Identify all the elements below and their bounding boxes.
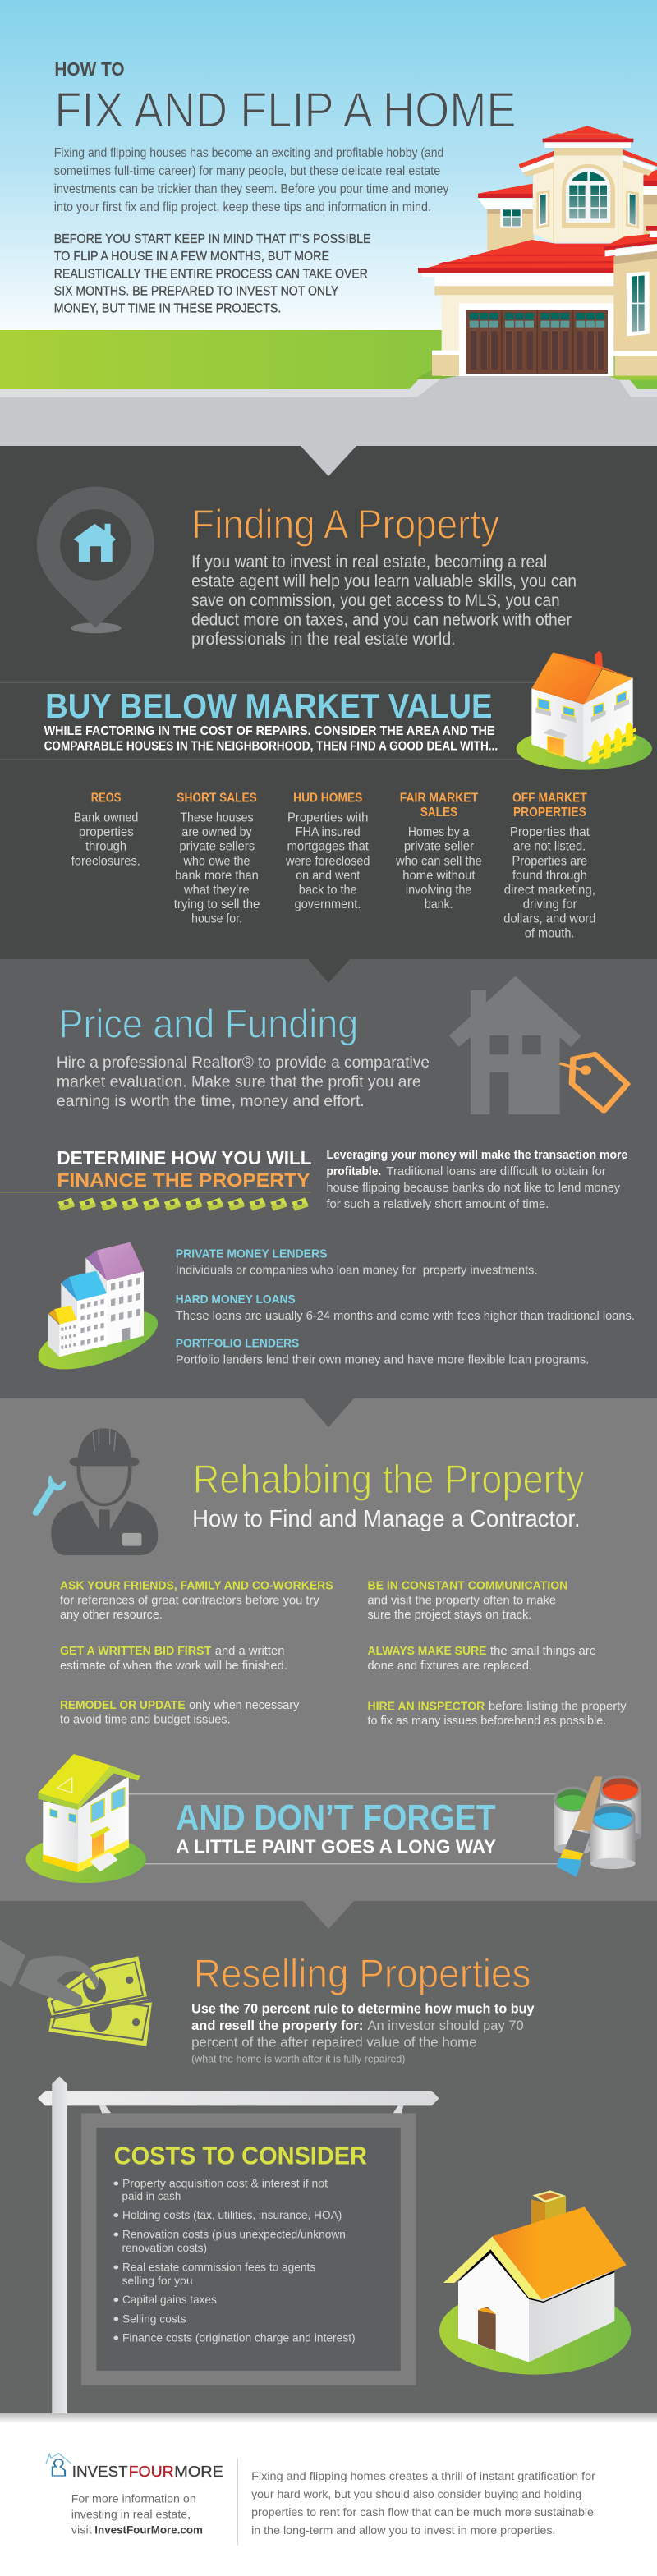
logo: invest four more bbox=[46, 2454, 223, 2481]
column: off market properties bbox=[503, 790, 596, 940]
timing paragraph: REALISTICALLY THE ENTIRE PROCESS CAN TAKE OVER bbox=[54, 267, 368, 282]
column: fair market sales: SALES bbox=[420, 805, 457, 819]
icon: hand with money bbox=[0, 1940, 152, 2046]
tip: inspector: HIRE AN INSPECTOR bbox=[367, 1698, 485, 1713]
side windows bbox=[536, 190, 639, 229]
arched window bbox=[562, 164, 615, 228]
tower bbox=[519, 126, 657, 244]
costs list: paid in cash bbox=[122, 2190, 181, 2202]
tip: communication: sure the project stays on track. bbox=[367, 1607, 531, 1622]
panel: costs to consider sign bbox=[81, 2113, 416, 2385]
notch arrow bbox=[301, 446, 356, 476]
grass bbox=[0, 330, 657, 389]
paint brush bbox=[557, 1776, 602, 1877]
garage block bbox=[422, 273, 613, 376]
column: hud homes: were foreclosed bbox=[285, 853, 370, 868]
heading: determine how you will finance the property: FINANCE THE PROPERTY bbox=[57, 1169, 310, 1191]
lender: private money lenders: PRIVATE MONEY LENDERS bbox=[176, 1247, 327, 1260]
column: fair market sales: private seller bbox=[404, 838, 474, 853]
leverage paragraph: for such a relatively short amount of time. bbox=[326, 1196, 549, 1210]
section background bbox=[0, 1398, 657, 1901]
more information text: visit bbox=[71, 2523, 92, 2537]
column: off market properties: OFF MARKET bbox=[512, 790, 587, 805]
icon: house with price tag bbox=[449, 976, 627, 1114]
costs list bbox=[114, 2177, 356, 2344]
sign post bbox=[38, 2076, 439, 2414]
price and funding body: Hire a professional Realtor® to provide a comparative bbox=[57, 1054, 430, 1072]
red can bbox=[600, 1775, 641, 1843]
column: short sales: who owe the bbox=[183, 853, 250, 868]
garage door bbox=[466, 310, 608, 374]
tip: remodel: REMODEL OR UPDATE bbox=[60, 1697, 186, 1711]
more information text: investing in real estate, bbox=[71, 2508, 191, 2521]
costs list: Capital gains taxes bbox=[122, 2294, 217, 2306]
money icons row bbox=[57, 1198, 309, 1211]
timing paragraph: MONEY, BUT TIME IN THESE PROJECTS. bbox=[54, 301, 281, 316]
section background bbox=[0, 446, 657, 959]
costs list: Holding costs (tax, utilities, insurance, HOA) bbox=[122, 2209, 342, 2221]
tip: remodel bbox=[60, 1697, 300, 1726]
column: fair market sales: who can sell the bbox=[395, 853, 482, 868]
column: fair market sales: Homes by a bbox=[408, 824, 470, 838]
timing paragraph bbox=[54, 232, 371, 316]
tip: small things bbox=[367, 1643, 596, 1672]
band rules bbox=[126, 1793, 558, 1865]
how to label: HOW TO bbox=[54, 59, 125, 80]
tip: communication bbox=[367, 1578, 567, 1622]
column: short sales: house for. bbox=[191, 911, 242, 925]
notch arrow bbox=[303, 1398, 354, 1427]
tip: small things: the small things are bbox=[490, 1643, 596, 1658]
leverage paragraph bbox=[326, 1147, 627, 1210]
column: short sales bbox=[174, 790, 260, 925]
column: off market properties: direct marketing, bbox=[504, 882, 595, 897]
column: reos: through bbox=[85, 838, 126, 853]
illustration: suburban house with red roof bbox=[402, 126, 657, 397]
price and funding body bbox=[57, 1054, 430, 1110]
panel: reselling properties bbox=[0, 1901, 657, 2414]
column: fair market sales: FAIR MARKET bbox=[400, 790, 479, 805]
intro paragraph: into your first fix and flip project, keep these tips and information in mind. bbox=[54, 200, 431, 214]
panel: rehabbing the property bbox=[0, 1398, 657, 1901]
column: hud homes: government. bbox=[295, 897, 361, 911]
column: short sales: SHORT SALES bbox=[177, 790, 257, 805]
leverage paragraph: profitable. bbox=[326, 1164, 381, 1178]
illustration: orange roof house bbox=[439, 2190, 631, 2375]
column: off market properties: dollars, and word bbox=[503, 911, 596, 925]
column: hud homes: FHA insured bbox=[296, 824, 361, 838]
column: reos: Bank owned bbox=[74, 810, 138, 824]
right house front bbox=[604, 226, 657, 376]
heading: finding a property: Finding A Property bbox=[191, 502, 500, 548]
heading: costs to consider: COSTS TO CONSIDER bbox=[114, 2142, 367, 2170]
illustration: lime roof house bbox=[25, 1754, 146, 1883]
illustration: isometric white house with orange roof bbox=[517, 651, 652, 770]
finding a property body: professionals in the real estate world. bbox=[191, 630, 456, 649]
column: hud homes: on and went bbox=[296, 867, 360, 882]
lender: portfolio lenders bbox=[176, 1336, 589, 1366]
blue can bbox=[590, 1803, 636, 1869]
section background bbox=[0, 959, 657, 1398]
closing paragraph bbox=[251, 2470, 595, 2537]
column: fair market sales bbox=[395, 790, 482, 911]
tip: ask friends: any other resource. bbox=[60, 1607, 163, 1622]
more information text: InvestFourMore.com bbox=[94, 2523, 203, 2537]
finding a property body bbox=[191, 553, 577, 649]
lender: hard money loans bbox=[176, 1292, 635, 1322]
notch arrow bbox=[303, 1901, 354, 1929]
illustration: apartment buildings bbox=[31, 1242, 164, 1381]
costs list: Property acquisition cost & interest if not bbox=[122, 2177, 328, 2189]
tip: small things: done and fixtures are replaced. bbox=[367, 1658, 532, 1672]
column: reos: properties bbox=[79, 824, 134, 838]
tip: written bid: GET A WRITTEN BID FIRST bbox=[60, 1643, 211, 1658]
intro paragraph: Fixing and flipping houses has become an exciting and profitable hobby (and bbox=[54, 146, 443, 160]
panel: footer bbox=[46, 2454, 595, 2546]
costs list: renovation costs) bbox=[122, 2242, 207, 2254]
price and funding body: earning is worth the time, money and effort. bbox=[57, 1092, 365, 1110]
costs list: Selling costs bbox=[122, 2312, 186, 2325]
tip: communication: BE IN CONSTANT COMMUNICATION bbox=[367, 1578, 567, 1592]
column: short sales: bank more than bbox=[175, 867, 259, 882]
column: short sales: what they’re bbox=[183, 882, 250, 897]
tip: ask friends bbox=[60, 1578, 333, 1622]
main roof bbox=[418, 240, 616, 273]
70 percent rule text bbox=[191, 2001, 535, 2065]
column: short sales: trying to sell the bbox=[174, 897, 260, 911]
70 percent rule text: percent of the after repaired value of the home bbox=[191, 2035, 477, 2050]
illustration: paint cans and brush bbox=[554, 1775, 641, 1877]
tip: written bid: and a written bbox=[215, 1643, 284, 1658]
column: hud homes: HUD HOMES bbox=[293, 790, 362, 805]
70 percent rule text: An investor should pay 70 bbox=[367, 2018, 524, 2033]
band rules bbox=[0, 682, 540, 760]
tip: communication: and visit the property often to make bbox=[367, 1593, 556, 1607]
costs list: Real estate commission fees to agents bbox=[122, 2261, 315, 2273]
column: short sales: private sellers bbox=[179, 838, 255, 853]
more information text bbox=[71, 2492, 203, 2537]
column: hud homes: mortgages that bbox=[287, 838, 369, 853]
notch arrow bbox=[308, 959, 350, 983]
lender: portfolio lenders: PORTFOLIO LENDERS bbox=[176, 1336, 299, 1350]
costs list: Finance costs (origination charge and interest) bbox=[122, 2331, 356, 2344]
panel: price and funding bbox=[0, 959, 657, 1398]
curb bbox=[0, 389, 657, 397]
timing paragraph: BEFORE YOU START KEEP IN MIND THAT IT’S POSSIBLE bbox=[54, 232, 371, 246]
tip: remodel: only when necessary bbox=[189, 1697, 300, 1711]
70 percent rule text: and resell the property for: bbox=[191, 2018, 363, 2033]
logo: invest four more: FOUR bbox=[129, 2464, 174, 2481]
sky background bbox=[0, 0, 657, 331]
intro paragraph bbox=[54, 146, 449, 214]
column: hud homes bbox=[285, 790, 370, 911]
logo: invest four more: INVEST bbox=[72, 2464, 128, 2481]
intro paragraph: sometimes full-time career) for many people, but these delicate real estate bbox=[54, 164, 440, 178]
tip: remodel: to avoid time and budget issues. bbox=[60, 1712, 231, 1726]
column: off market properties: Properties are bbox=[512, 853, 587, 868]
green can bbox=[554, 1786, 592, 1854]
column: off market properties: of mouth. bbox=[525, 925, 574, 940]
road bbox=[0, 397, 657, 446]
buy below subheading bbox=[44, 723, 498, 753]
divider bbox=[237, 2459, 238, 2546]
lender: private money lenders bbox=[176, 1247, 538, 1277]
more information text: For more information on bbox=[71, 2492, 196, 2505]
column: short sales: These houses bbox=[180, 810, 254, 824]
icon: map pin with house bbox=[37, 487, 154, 633]
left wing bbox=[478, 184, 534, 250]
intro text block bbox=[54, 59, 517, 316]
tip: ask friends: for references of great contractors before you try bbox=[60, 1593, 319, 1607]
heading: and don't forget: AND DON’T FORGET bbox=[176, 1798, 496, 1837]
shadow under panels bbox=[0, 2413, 657, 2423]
tip: written bid bbox=[60, 1643, 287, 1672]
heading: determine how you will finance the property bbox=[57, 1147, 312, 1191]
intro paragraph: investments can be trickier than they seem. Before you pour time and money bbox=[54, 182, 449, 196]
column: fair market sales: involving the bbox=[406, 882, 471, 897]
column: fair market sales: bank. bbox=[425, 897, 453, 911]
timing paragraph: SIX MONTHS. BE PREPARED TO INVEST NOT ONLY bbox=[54, 284, 338, 299]
costs list: selling for you bbox=[122, 2275, 193, 2287]
tip: written bid: estimate of when the work will be finished. bbox=[60, 1658, 287, 1672]
tip: small things: ALWAYS MAKE SURE bbox=[367, 1643, 486, 1658]
costs list: Renovation costs (plus unexpected/unknown bbox=[122, 2228, 346, 2240]
icon: contractor with wrench bbox=[36, 1429, 158, 1555]
tip: inspector bbox=[367, 1698, 627, 1728]
column: short sales: are owned by bbox=[181, 824, 252, 838]
column: hud homes: Properties with bbox=[287, 810, 368, 824]
heading: determine how you will finance the property: DETERMINE HOW YOU WILL bbox=[57, 1147, 312, 1169]
section background bbox=[0, 1901, 657, 2413]
price and funding body: market evaluation. Make sure that the profit you are bbox=[57, 1073, 421, 1091]
column: fair market sales: home without bbox=[402, 867, 476, 882]
right wing bbox=[643, 170, 657, 245]
subheading: a little paint: A LITTLE PAINT GOES A LONG WAY bbox=[176, 1836, 496, 1857]
column: reos: foreclosures. bbox=[71, 853, 140, 868]
logo: invest four more: MORE bbox=[174, 2464, 223, 2481]
column: off market properties: found through bbox=[512, 867, 587, 882]
column: reos: REOS bbox=[91, 790, 121, 805]
column: off market properties: are not listed. bbox=[513, 838, 586, 853]
column: off market properties: driving for bbox=[523, 897, 577, 911]
tip: ask friends: ASK YOUR FRIENDS, FAMILY AND CO-WORKERS bbox=[60, 1578, 333, 1592]
driveway bbox=[402, 370, 657, 397]
timing paragraph: TO FLIP A HOUSE IN A FEW MONTHS, BUT MORE bbox=[54, 249, 329, 264]
column: off market properties: PROPERTIES bbox=[513, 805, 586, 819]
lender: hard money loans: HARD MONEY LOANS bbox=[176, 1292, 296, 1306]
column: hud homes: back to the bbox=[299, 882, 357, 897]
column: off market properties: Properties that bbox=[510, 824, 590, 838]
column: reos bbox=[71, 790, 140, 868]
70 percent rule text: (what the home is worth after it is fully repaired) bbox=[191, 2053, 405, 2065]
heading: price and funding: Price and Funding bbox=[58, 1001, 358, 1046]
